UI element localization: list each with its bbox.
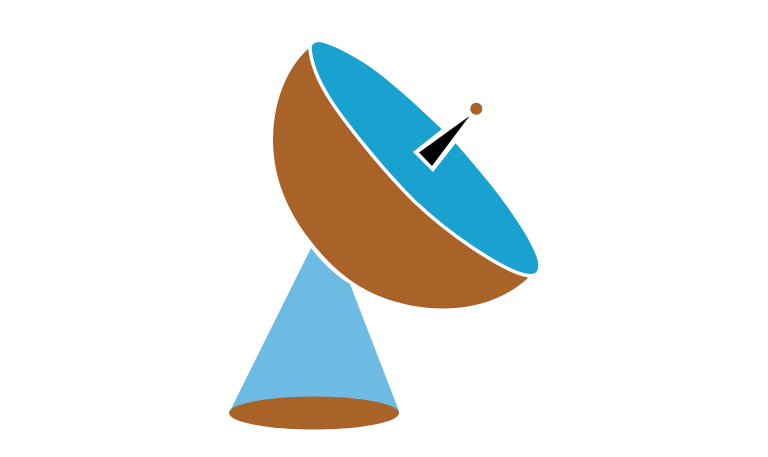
- icon: black antenna feed: [419, 116, 470, 166]
- icon: brown receiver dot: [470, 103, 482, 115]
- icon: stand base ellipse: [229, 396, 399, 430]
- icon: brown dish bowl: [273, 49, 528, 308]
- icon: blue dish face: [310, 40, 540, 276]
- icon: white antenna mount: [413, 120, 472, 172]
- icon: light blue cone stand: [230, 248, 399, 411]
